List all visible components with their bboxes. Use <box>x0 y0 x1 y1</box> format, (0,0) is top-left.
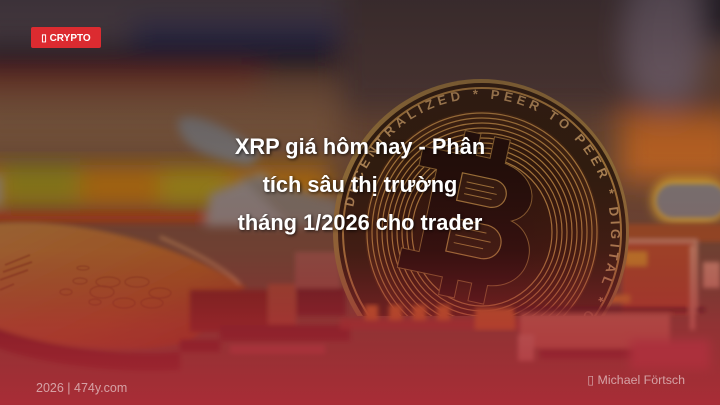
title: tháng 1/2026 cho trader <box>238 210 482 235</box>
circuit board connector blocks <box>180 252 350 354</box>
category badge: ▯ CRYPTO <box>41 33 91 44</box>
bitcoin coin <box>333 79 629 316</box>
category badge <box>31 27 101 48</box>
water droplets on flat coin <box>0 255 171 308</box>
title: XRP giá hôm nay - Phân <box>235 134 485 159</box>
flat coin lying on the left <box>0 222 246 371</box>
title <box>235 134 487 238</box>
coin rim lettering: DECENTRALIZED * PEER TO PEER * DIGITAL * CRYPTO CURRENCY <box>344 90 620 316</box>
right connector on circuit board <box>515 245 705 361</box>
author credit: ▯ Michael Förtsch <box>587 373 685 387</box>
chip row at coin base <box>340 305 525 330</box>
bitcoin symbol <box>396 130 532 305</box>
title: tích sâu thị trường <box>263 172 457 197</box>
source and year: 2026 | 474y.com <box>36 381 127 395</box>
